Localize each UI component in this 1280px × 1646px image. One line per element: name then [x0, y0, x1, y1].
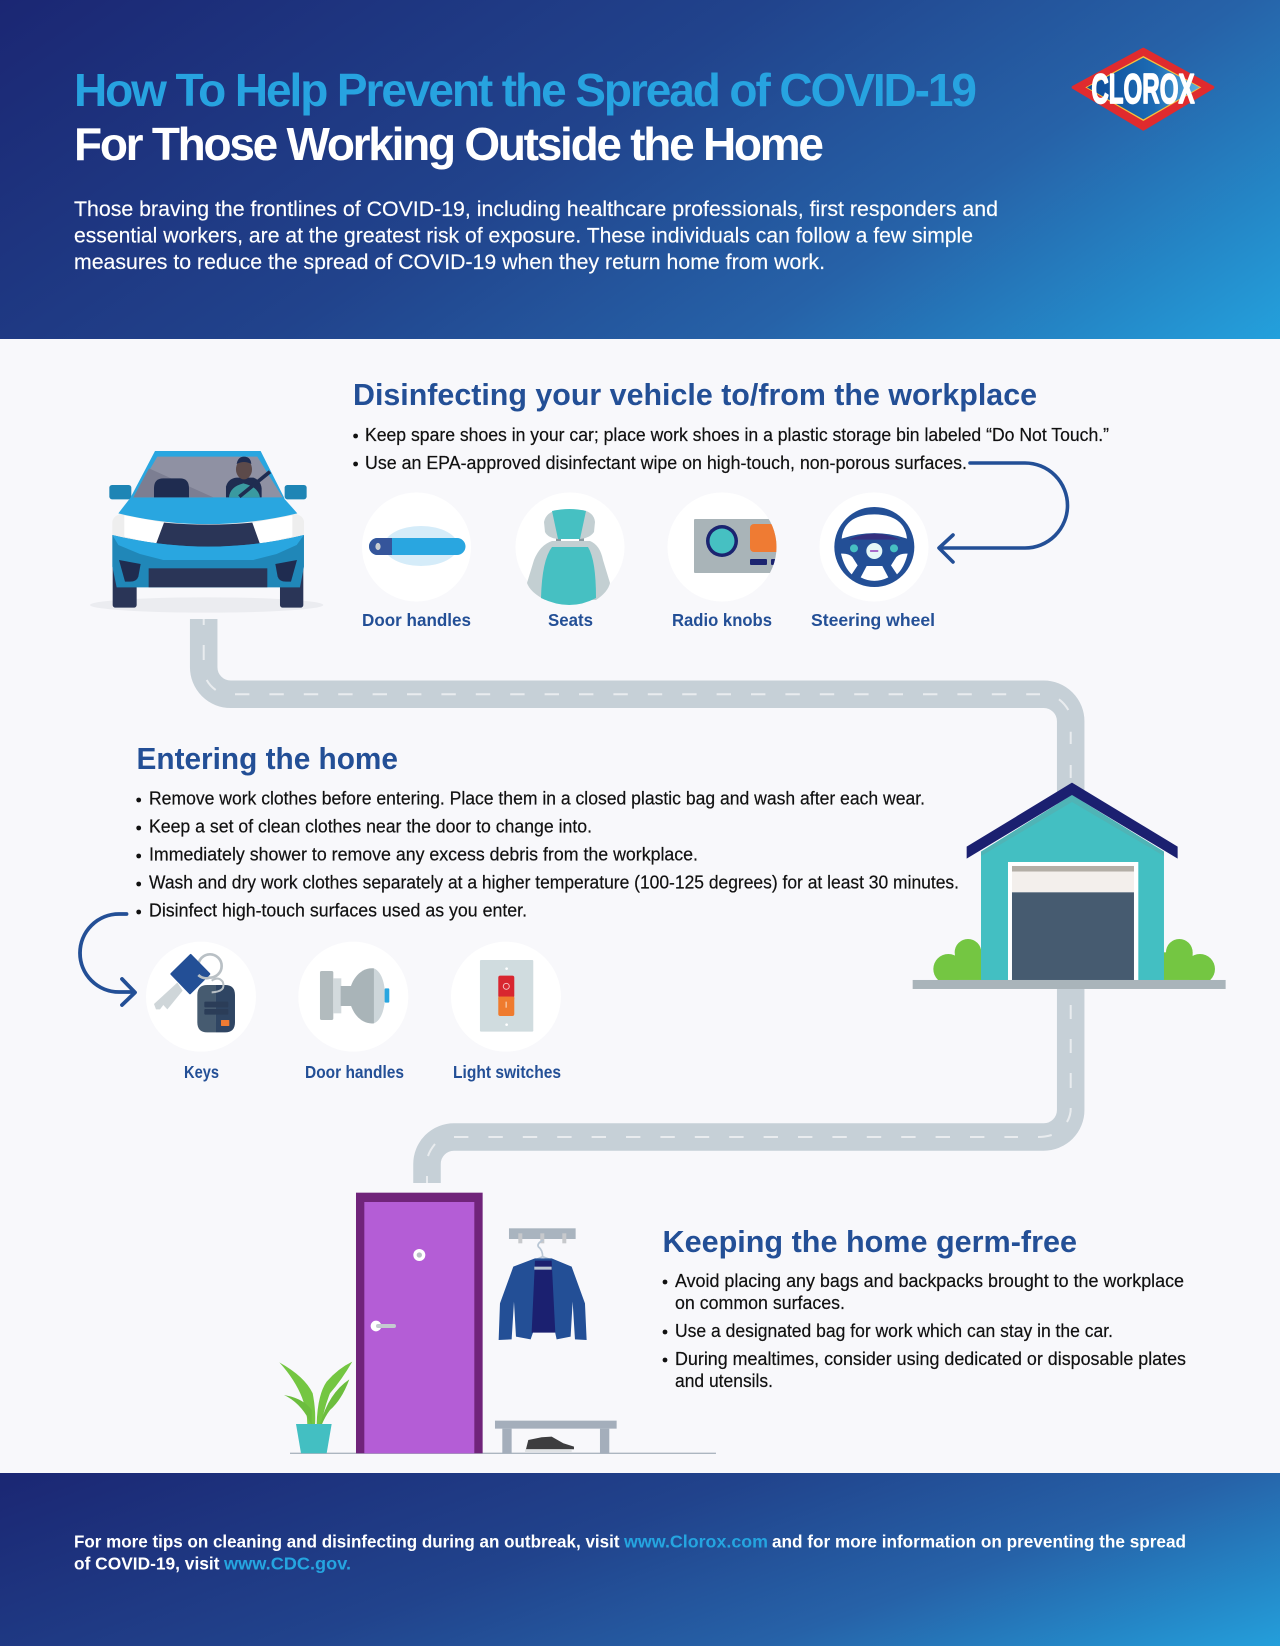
road	[204, 619, 1071, 1183]
label: Door handles	[305, 1062, 404, 1082]
footer text: www.CDC.gov.	[223, 1554, 351, 1574]
arrow to keys	[80, 914, 135, 1005]
section: keeping the home germ-free	[662, 1224, 1186, 1391]
icon: radio knobs	[694, 519, 776, 573]
label: Keys	[184, 1062, 219, 1082]
bullet list: Immediately shower to remove any excess debris from the workplace.	[149, 844, 698, 864]
footer text: www.Clorox.com	[623, 1532, 768, 1552]
section: entering the home	[80, 741, 959, 1082]
icon: door handle	[362, 492, 471, 602]
bullet list: and utensils.	[675, 1370, 773, 1391]
title line 1: How To Help Prevent the Spread of COVID-19	[74, 64, 977, 116]
Clorox logo: CLOROX	[1091, 66, 1195, 112]
label: Steering wheel	[811, 610, 935, 630]
icon: seat	[516, 492, 624, 605]
car illustration	[90, 451, 323, 613]
bullet list: Use a designated bag for work which can stay in the car.	[675, 1320, 1113, 1341]
Clorox logo	[1073, 49, 1213, 129]
intro paragraph	[74, 198, 998, 274]
footer text: and for more information on preventing the spread	[772, 1532, 1186, 1552]
heading: Entering the home	[136, 741, 398, 776]
bullet list: Disinfect high-touch surfaces used as you enter.	[149, 900, 527, 920]
icon: light switch	[451, 942, 561, 1052]
bullet list: Keep a set of clean clothes near the door to change into.	[149, 816, 592, 836]
section: disinfecting your vehicle	[353, 377, 1109, 630]
footer text	[74, 1532, 1186, 1574]
bullet list: Remove work clothes before entering. Place them in a closed plastic bag and wash after each wear.	[149, 788, 925, 808]
title line 2: For Those Working Outside the Home	[74, 118, 824, 170]
label: Seats	[548, 610, 593, 630]
footer text: For more tips on cleaning and disinfecting during an outbreak, visit	[74, 1532, 620, 1552]
plant	[279, 1362, 352, 1453]
floor line	[290, 1453, 716, 1454]
bullet list	[663, 1270, 1186, 1391]
label: Door handles	[362, 610, 471, 630]
bullet list	[353, 424, 1109, 473]
intro paragraph: measures to reduce the spread of COVID-19 when they return home from work.	[74, 251, 825, 274]
coat rack and jacket	[499, 1228, 587, 1340]
header banner	[0, 0, 1280, 339]
label: Radio knobs	[672, 610, 772, 630]
label: Light switches	[453, 1062, 561, 1082]
bullet list: Keep spare shoes in your car; place work shoes in a plastic storage bin labeled “Do Not Touch.”	[365, 424, 1109, 445]
bullet list: During mealtimes, consider using dedicated or disposable plates	[675, 1348, 1186, 1369]
bench and shoe	[495, 1421, 617, 1453]
intro paragraph: essential workers, are at the greatest risk of exposure. These individuals can follow a few simple	[74, 224, 973, 248]
heading: Disinfecting your vehicle to/from the workplace	[353, 377, 1037, 412]
door and entry illustration	[279, 1193, 716, 1454]
heading: Keeping the home germ-free	[662, 1224, 1077, 1259]
bullet list	[136, 788, 959, 920]
bullet list: Avoid placing any bags and backpacks brought to the workplace	[675, 1270, 1184, 1291]
bullet list: Use an EPA-approved disinfectant wipe on high-touch, non-porous surfaces.	[365, 452, 967, 473]
arrow to steering wheel	[939, 463, 1068, 562]
bullet list: on common surfaces.	[675, 1292, 845, 1313]
footer banner	[0, 1473, 1280, 1646]
footer text: of COVID-19, visit	[74, 1554, 220, 1574]
icon: steering wheel	[820, 492, 928, 602]
bullet list: Wash and dry work clothes separately at a higher temperature (100-125 degrees) for at least 30 minutes.	[149, 872, 959, 892]
icon: keys	[146, 942, 256, 1052]
door	[356, 1193, 483, 1453]
icon: door knob	[298, 942, 408, 1052]
house illustration	[913, 783, 1226, 989]
intro paragraph: Those braving the frontlines of COVID-19, including healthcare professionals, first responders and	[74, 198, 998, 221]
